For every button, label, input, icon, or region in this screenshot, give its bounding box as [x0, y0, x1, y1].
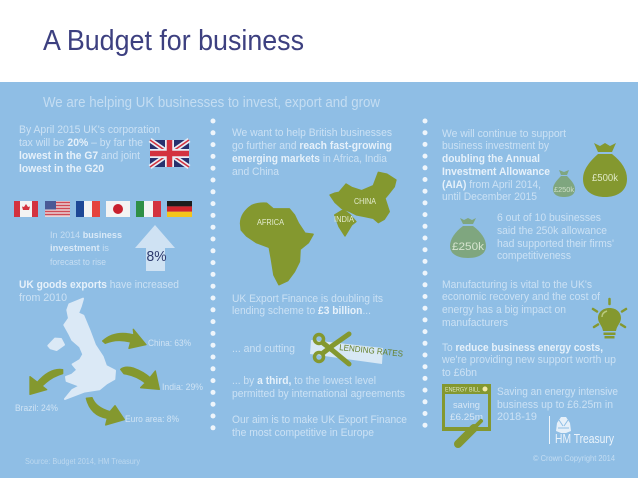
- map: China and India: CHINA: [354, 197, 377, 206]
- text: corporation tax: By April 2015 UK's corporation: [19, 124, 160, 136]
- icon: scissors cutting lending rates: [310, 334, 404, 364]
- text: six out of ten: said the 250k allowance: [497, 225, 607, 237]
- text: reduce energy costs: To reduce business energy costs,: [442, 342, 603, 354]
- map: China and India: INDIA: [334, 215, 355, 224]
- text: six out of ten: [497, 212, 614, 262]
- text: emerging markets: go further and reach fast-growing: [232, 140, 392, 152]
- map: Africa: AFRICA: [257, 218, 285, 227]
- icon: £250k money bag: £250k: [452, 241, 485, 253]
- text: saving energy: business up to £6.25m in: [497, 399, 613, 411]
- map: United Kingdom: [48, 299, 115, 399]
- text: six out of ten: had supported their firms': [497, 238, 614, 250]
- text: reduce energy costs: to £6bn: [442, 367, 477, 379]
- text: corporation tax: tax will be 20% – by far the: [19, 137, 143, 149]
- icon: small £250k money bag: £250k: [554, 187, 575, 194]
- icon: light bulb: [593, 299, 626, 338]
- logo: HM Treasury: HM Treasury: [555, 432, 615, 446]
- dotted divider: left: [210, 118, 216, 430]
- text: annual investment allowance: until December 2015: [442, 191, 537, 203]
- logo: HM Treasury: [549, 416, 615, 446]
- text: manufacturing: [442, 279, 601, 329]
- text: annual investment allowance: business investment by: [442, 140, 549, 152]
- text: manufacturing: economic recovery and the cost of: [442, 291, 601, 303]
- labels: export growth: China: 63%: [148, 338, 191, 349]
- title: A Budget for business: [43, 25, 304, 57]
- text: UK Export Finance: UK Export Finance is doubling its: [232, 293, 383, 305]
- text: emerging markets: [232, 127, 392, 178]
- icon: G7 flags: [14, 201, 192, 217]
- map: China and India: [330, 172, 396, 236]
- arrows: export directions: [30, 329, 159, 425]
- icon: UK flag: [150, 140, 189, 167]
- icon: energy bill and pen: £6.25m: [450, 412, 483, 423]
- subtitle: We are helping UK businesses to invest, export and grow: [43, 94, 380, 111]
- icon: £500k money bag: [583, 143, 627, 197]
- text: corporation tax: lowest in the G20: [19, 163, 104, 175]
- text: emerging markets: We want to help British businesses: [232, 127, 392, 139]
- dotted divider: right: [422, 118, 428, 428]
- icon: £250k money bag: [450, 218, 486, 258]
- text: annual investment allowance: We will continue to support: [442, 128, 567, 140]
- text: six out of ten: 6 out of 10 businesses: [497, 212, 601, 224]
- icon: up arrow 8%: [135, 225, 175, 271]
- labels: export growth: Brazil: 24%: [15, 403, 58, 414]
- text: business investment: investment is: [50, 243, 109, 254]
- text: annual investment allowance: Investment Allowance: [442, 166, 550, 178]
- text: manufacturing: Manufacturing is vital to the UK's: [442, 279, 592, 291]
- text: UK Export Finance: lending scheme to £3 billion...: [232, 305, 371, 317]
- text: manufacturing: energy has a big impact on: [442, 304, 566, 316]
- icon: £500k money bag: £500k: [592, 173, 619, 184]
- text: corporation tax: [19, 124, 160, 175]
- map: Africa: [241, 203, 313, 285]
- icon: up arrow 8%: 8%: [146, 248, 166, 265]
- source: Source: Budget 2014, HM Treasury: [25, 457, 140, 466]
- text: saving energy: [497, 386, 618, 423]
- text: business investment: forecast to rise: [50, 257, 106, 268]
- text: aim: Our aim is to make UK Export Finance: [232, 414, 407, 426]
- text: reduce energy costs: [441, 342, 616, 379]
- text: business investment: In 2014 business: [50, 230, 122, 241]
- text: emerging markets: and China: [232, 166, 280, 178]
- icon: scissors cutting lending rates: LENDING RATES: [339, 342, 404, 359]
- text: UK goods exports: UK goods exports have increased: [19, 279, 179, 291]
- text: reduce energy costs: we're providing new support worth up: [441, 354, 616, 366]
- text: business investment: [50, 230, 122, 268]
- text: manufacturing: manufacturers: [442, 317, 508, 329]
- text: UK goods exports: from 2010: [19, 292, 67, 304]
- text: emerging markets: emerging markets in Africa, India: [232, 153, 388, 165]
- icon: energy bill and pen: ENERGY BILL: [445, 388, 481, 394]
- text: saving energy: Saving an energy intensive: [497, 386, 618, 398]
- text: annual investment allowance: doubling the Annual: [442, 153, 540, 165]
- text: six out of ten: competitiveness: [497, 250, 571, 262]
- icon: energy bill and pen: [442, 384, 491, 444]
- text: aim: [232, 414, 407, 439]
- icon: small £250k money bag: [553, 170, 575, 197]
- copyright: © Crown Copyright 2014: [533, 454, 616, 463]
- text: corporation tax: lowest in the G7 and joint: [19, 150, 141, 162]
- text: UK goods exports: [19, 279, 179, 304]
- labels: export growth: Euro area: 8%: [125, 414, 179, 425]
- text: aim: the most competitive in Europe: [232, 427, 374, 439]
- labels: export growth: [15, 338, 203, 425]
- text: annual investment allowance: [442, 128, 567, 203]
- text: UK Export Finance: [232, 293, 383, 317]
- text: annual investment allowance: (AIA) from April 2014,: [442, 179, 541, 191]
- text: saving energy: 2018-19: [497, 411, 537, 423]
- text: by a third: [232, 375, 405, 400]
- icon: energy bill and pen: saving: [453, 400, 480, 411]
- text: and cutting: ... and cutting: [232, 343, 295, 355]
- text: by a third: ... by a third, to the lowest level: [232, 375, 376, 387]
- labels: export growth: India: 29%: [162, 382, 203, 393]
- text: by a third: permitted by international agreements: [232, 388, 405, 400]
